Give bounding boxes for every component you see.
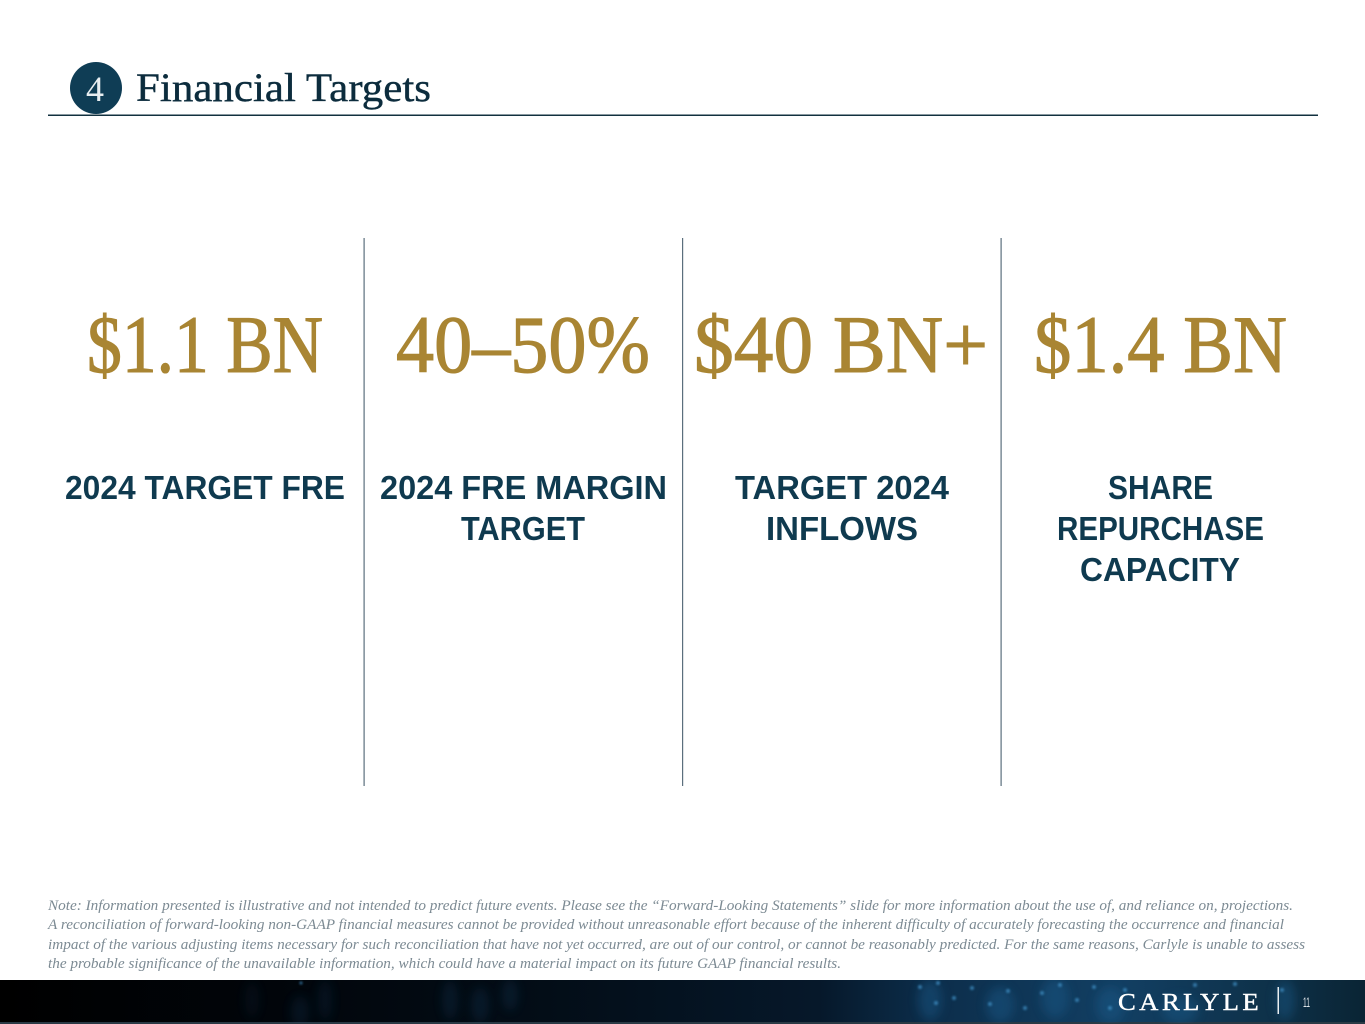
metric value: 40–50% [396, 299, 650, 390]
panel: 2024 target FRE [65, 299, 345, 506]
footer band [0, 978, 1365, 1024]
footnote: A reconciliation of forward-looking non-GAAP financial measures cannot be provided without unreasonable effort because of the inherent difficulty of accurately forecasting the occurrence and financial [47, 917, 1284, 933]
metric value: $40 BN+ [694, 299, 988, 390]
logo: Carlyle wordmark: CARLYLE [1118, 990, 1262, 1016]
text: 11 [1303, 994, 1310, 1010]
panel: share repurchase capacity [1034, 299, 1287, 588]
footnote [47, 898, 1305, 972]
metric label: TARGET 2024 [735, 469, 950, 506]
metric label: SHARE [1108, 469, 1213, 506]
metric label: INFLOWS [766, 510, 918, 547]
metric label [735, 469, 950, 547]
metric value: $1.4 BN [1034, 299, 1287, 390]
metric value: $1.1 BN [87, 299, 323, 390]
metric label: 2024 FRE MARGIN [380, 469, 667, 506]
metric label: CAPACITY [1080, 551, 1240, 588]
icon: section number badge: 4 [86, 69, 104, 109]
footnote: the probable significance of the unavailable information, which could have a material impact on its future GAAP financial results. [48, 956, 841, 972]
panel: target 2024 inflows [694, 299, 988, 547]
metric label: 2024 TARGET FRE [65, 469, 345, 506]
metric label: REPURCHASE [1057, 510, 1264, 547]
title: Financial Targets [136, 65, 431, 110]
icon: section number badge [70, 62, 122, 114]
metric label [1057, 469, 1264, 588]
section header [70, 62, 431, 114]
metric label: TARGET [461, 510, 585, 547]
panel: 2024 FRE margin target [380, 299, 667, 547]
metric label [380, 469, 667, 547]
footnote: Note: Information presented is illustrative and not intended to predict future events. Please see the “Forward-Looking Statements” slide for more information about the use of, and reliance on, projections. [47, 898, 1293, 914]
footnote: impact of the various adjusting items necessary for such reconciliation that have not yet occurred, are out of our control, or cannot be reasonably predicted. For the same reasons, Carlyle is unable to assess [48, 937, 1305, 953]
